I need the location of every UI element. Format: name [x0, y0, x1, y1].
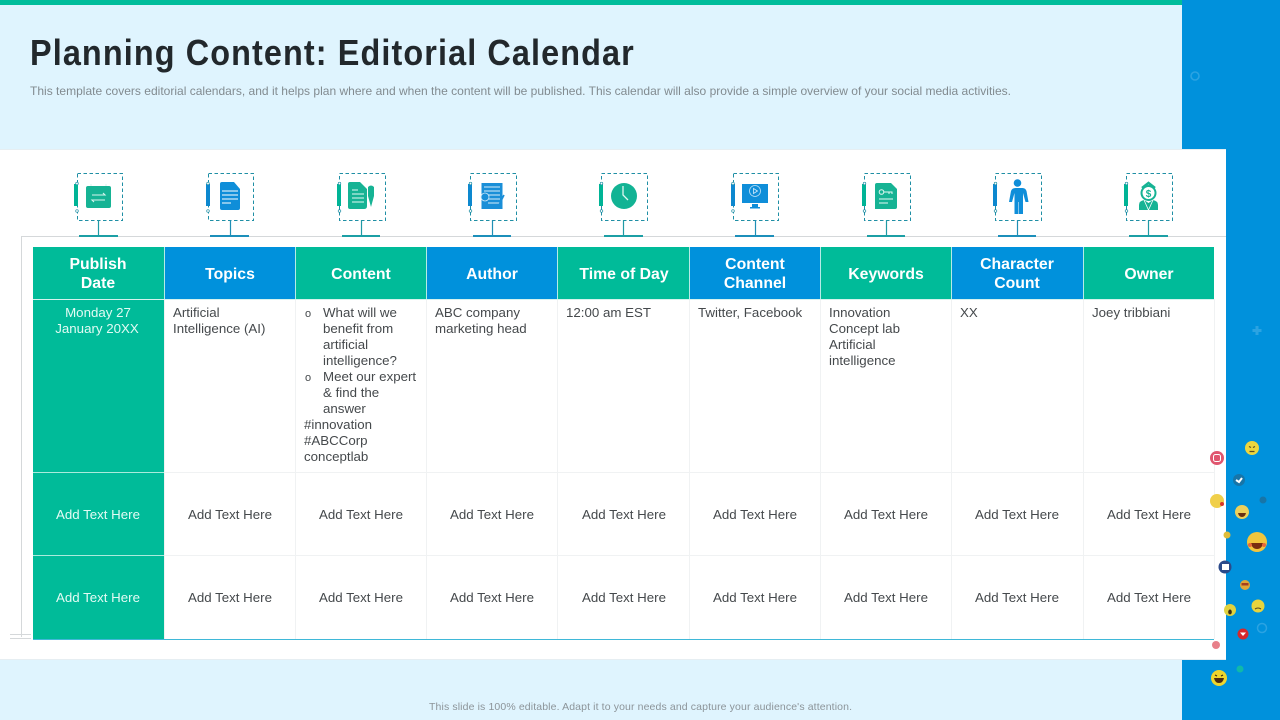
row 3 text: Add Text Here	[1107, 590, 1191, 605]
row 2 text: Add Text Here	[713, 507, 797, 522]
row 1 text: Concept lab	[829, 321, 900, 336]
header row: Time of Day	[579, 266, 669, 283]
row 2 text: Add Text Here	[450, 507, 534, 522]
title: Planning Content: Editorial Calendar	[30, 33, 635, 73]
icon: topics document	[206, 174, 254, 237]
header row	[33, 247, 1214, 300]
row 3 text: Add Text Here	[582, 590, 666, 605]
panel: calendar card	[0, 149, 1226, 660]
row 2 text: Add Text Here	[56, 507, 140, 522]
row 3 text: Add Text Here	[713, 590, 797, 605]
row 3 text: Add Text Here	[188, 590, 272, 605]
row 2 text: Add Text Here	[188, 507, 272, 522]
social media reaction icons	[1210, 441, 1267, 686]
row 3 text: Add Text Here	[319, 590, 403, 605]
header row: Content	[331, 266, 392, 283]
row 1 text: Intelligence (AI)	[173, 321, 265, 336]
header row: Publish	[69, 256, 127, 273]
icon: content notes and pen	[337, 174, 386, 237]
row 1 text: marketing head	[435, 321, 527, 336]
header row: Character	[980, 256, 1054, 273]
subtitle: This template covers editorial calendars, and it helps plan where and when the content will be published. This calendar will also provide a simple overview of your social media activities.	[30, 84, 1011, 98]
row 3 text: Add Text Here	[450, 590, 534, 605]
icon: author signed document	[468, 174, 516, 237]
row 1 text: Meet our expert	[323, 369, 416, 384]
row 2 text	[56, 507, 1191, 522]
table body background	[33, 299, 1214, 639]
icon: keywords key document	[862, 174, 910, 237]
icon: time of day clock	[599, 174, 648, 237]
row 3 text: Add Text Here	[975, 590, 1059, 605]
row 1 text: Artificial	[829, 337, 876, 352]
header row: Date	[81, 275, 115, 292]
row 1 text: & find the	[323, 385, 379, 400]
row 1 text: intelligence	[829, 353, 896, 368]
row 1 text: #ABCCorp	[304, 433, 368, 448]
header row: Topics	[205, 266, 255, 283]
header row: Content	[725, 256, 786, 273]
right blue panel	[1182, 0, 1280, 720]
row 2 text: Add Text Here	[975, 507, 1059, 522]
row 1 text: Artificial	[173, 305, 220, 320]
first column fill	[33, 299, 164, 639]
row 1 text: 12:00 am EST	[566, 305, 651, 320]
icon: character count person	[993, 174, 1042, 237]
row 3 text	[56, 590, 1191, 605]
header row: Count	[994, 275, 1041, 292]
row 3 text: Add Text Here	[844, 590, 928, 605]
row 2 text: Add Text Here	[582, 507, 666, 522]
row 1 text: What will we	[323, 305, 397, 320]
icon: publish date calendar	[74, 174, 122, 237]
row 1 text: Monday 27	[65, 305, 131, 320]
header row: Channel	[724, 275, 786, 292]
row 1 text: Innovation	[829, 305, 890, 320]
header row: Keywords	[848, 266, 924, 283]
footer note: This slide is 100% editable. Adapt it to your needs and capture your audience's attention.	[429, 701, 852, 713]
row 2 text: Add Text Here	[1107, 507, 1191, 522]
row 2 text: Add Text Here	[319, 507, 403, 522]
header row: Author	[466, 266, 518, 283]
row 1 text: benefit from	[323, 321, 393, 336]
row 1 text: answer	[323, 401, 366, 416]
table	[33, 247, 1214, 640]
row 2 text: Add Text Here	[844, 507, 928, 522]
row 1 text: ABC company	[435, 305, 520, 320]
row 3 text: Add Text Here	[56, 590, 140, 605]
row 1 text: o	[305, 372, 311, 384]
icon: owner person with dollar: $	[1146, 189, 1152, 200]
row 1 text: January 20XX	[55, 321, 139, 336]
header row: Owner	[1124, 266, 1174, 283]
row 1 text: intelligence?	[323, 353, 397, 368]
row 1 text: o	[305, 308, 311, 320]
icon: owner person with dollar	[1124, 174, 1172, 237]
icon: content channel monitor	[731, 174, 778, 237]
row 1 text: #innovation	[304, 417, 372, 432]
row 1 text: XX	[960, 305, 978, 320]
row 1 text: conceptlab	[304, 449, 368, 464]
row 1 text: Joey tribbiani	[1092, 305, 1170, 320]
row 1 text: Twitter, Facebook	[698, 305, 803, 320]
row 1 text: artificial	[323, 337, 368, 352]
row 1 text	[55, 305, 1170, 464]
